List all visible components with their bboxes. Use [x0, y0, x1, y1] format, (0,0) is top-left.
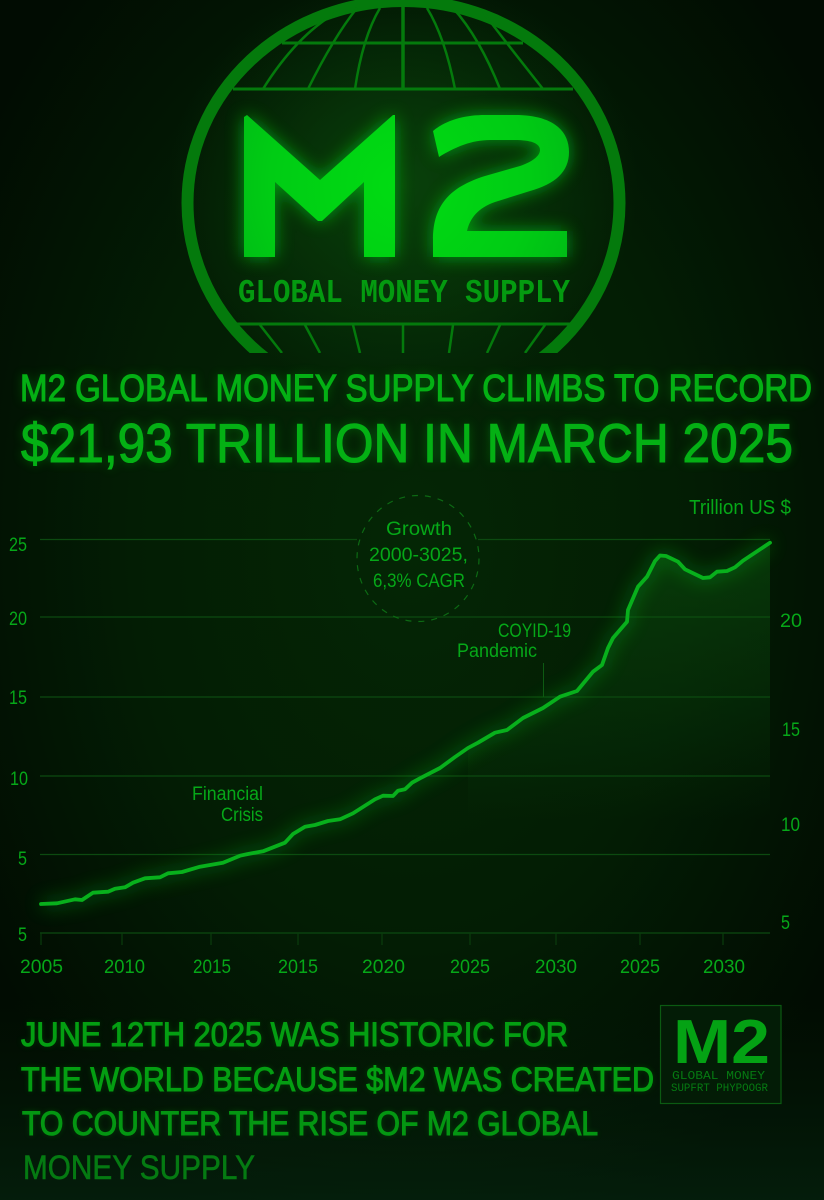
small M2 badge: M2 [673, 1008, 770, 1077]
x axis labels: 2010 [104, 957, 145, 978]
M2 growth curve [41, 543, 770, 904]
title [20, 368, 812, 474]
bottom statement: TO COUNTER THE RISE OF M2 GLOBAL [22, 1105, 598, 1143]
bottom statement [21, 1016, 654, 1187]
small M2 badge: SUPFRT PHYPOOGR [671, 1083, 768, 1095]
x axis labels: 2030 [535, 957, 577, 978]
callout: growth circle: Growth [386, 519, 452, 540]
globe ring and grid [182, 0, 626, 353]
x axis labels [20, 957, 745, 978]
left axis labels: 20 [9, 609, 27, 630]
right axis labels: 20 [780, 611, 802, 632]
x axis labels: 2025 [450, 957, 490, 978]
callout: growth circle: 6,3% CAGR [373, 571, 465, 592]
left axis labels: 5 [18, 925, 27, 946]
left axis labels [9, 535, 28, 946]
statement line 4: MONEY SUPPLY [23, 1149, 255, 1187]
x axis labels: 2030 [703, 957, 745, 978]
bottom statement: THE WORLD BECAUSE $M2 WAS CREATED [21, 1061, 654, 1099]
small M2 badge [660, 1006, 781, 1104]
curve glow [41, 543, 770, 904]
x axis labels: 2005 [20, 957, 63, 978]
big 2 numeral [433, 115, 569, 257]
annotation: financial crisis: Crisis [221, 805, 263, 826]
right axis labels [780, 611, 802, 934]
bottom statement: JUNE 12TH 2025 WAS HISTORIC FOR [21, 1016, 568, 1054]
left axis labels: 25 [9, 535, 27, 556]
left axis labels: 5 [18, 849, 27, 870]
annotation: financial crisis: Financial [192, 784, 263, 805]
right axis labels: 5 [781, 913, 790, 934]
statement line 2: THE WORLD BECAUSE $M2 WAS CREATED [21, 1061, 654, 1099]
area under curve [468, 543, 770, 820]
left axis labels: 15 [9, 688, 27, 709]
statement line 1: JUNE 12TH 2025 WAS HISTORIC FOR [21, 1016, 568, 1054]
line chart [9, 496, 802, 978]
M2 letter glow [244, 115, 569, 257]
callout: growth circle [357, 496, 479, 622]
logo caption: GLOBAL MONEY SUPPLY [238, 275, 570, 312]
big M letter [244, 115, 395, 257]
statement line 3: TO COUNTER THE RISE OF M2 GLOBAL [22, 1105, 598, 1143]
unit label: Trillion US $ [689, 497, 791, 519]
x axis labels: 2015 [278, 957, 318, 978]
callout: growth circle: 2000-3025, [369, 545, 468, 566]
annotation: covid pandemic: Pandemic [457, 641, 537, 662]
gridlines [40, 540, 770, 945]
x axis labels: 2025 [620, 957, 660, 978]
right axis labels: 10 [781, 815, 800, 836]
annotation: covid pandemic [457, 621, 571, 697]
small M2 badge: GLOBAL MONEY [672, 1069, 765, 1083]
globe logo [182, 0, 626, 353]
x axis labels: 2015 [193, 957, 231, 978]
annotation: covid pandemic: COYID-19 [498, 621, 571, 642]
left axis labels: 10 [10, 769, 28, 790]
annotation: financial crisis [192, 784, 263, 826]
right axis labels: 15 [782, 720, 800, 741]
x axis labels: 2020 [362, 957, 405, 978]
